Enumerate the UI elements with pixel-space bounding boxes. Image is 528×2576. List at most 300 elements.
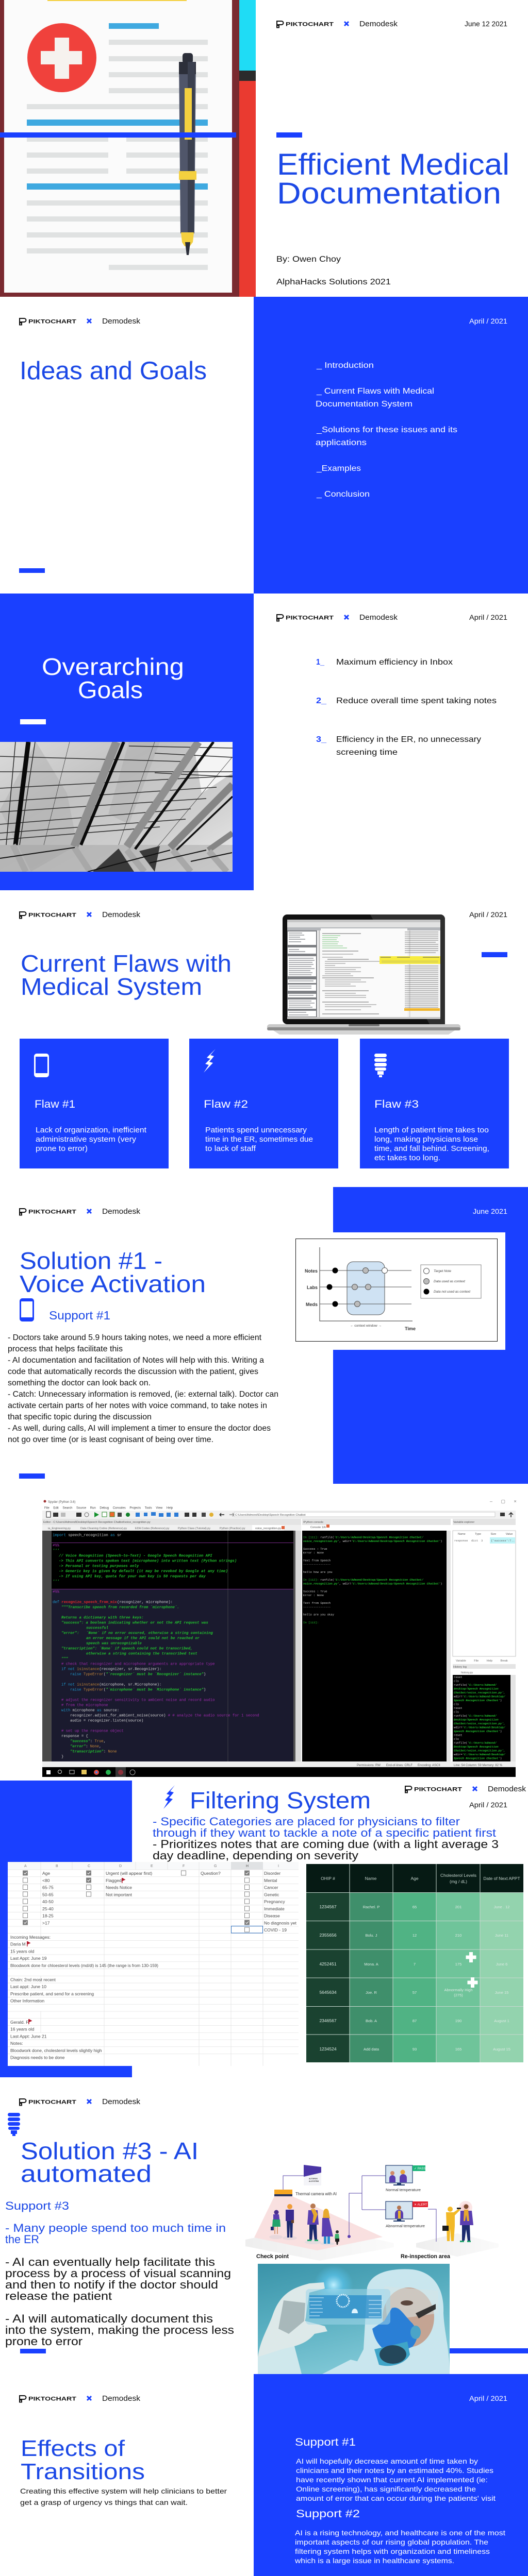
status bar: Encoding: ASCII	[418, 1764, 440, 1767]
filter columns text: Not important	[106, 1892, 133, 1897]
variable explorer panel: Variable File Help Break	[456, 1659, 508, 1663]
code editor: }	[61, 1755, 63, 1759]
variable explorer panel	[453, 1531, 516, 1674]
panel: blue agenda	[254, 297, 528, 594]
console panel: Success : True	[303, 1590, 327, 1593]
icon: lightning	[204, 1049, 216, 1073]
table: patient data: 7	[414, 1962, 416, 1967]
header logos: Demodesk	[102, 910, 141, 919]
heading: Filtering System	[190, 1787, 371, 1814]
panel: flaw 3: etc takes too long.	[374, 1154, 440, 1162]
history log panel: runfile('C:/Users/Admond/	[454, 1714, 497, 1718]
title	[277, 148, 509, 210]
history log panel: Chatbot/voice_recognition.py',	[454, 1749, 505, 1753]
table: patient data: June . 12	[494, 1905, 509, 1909]
screenshot: speech recognition code in Spyder: Spyder (Python 3.6)	[48, 1501, 75, 1504]
panel: flaw 2: Patients spend unnecessary	[205, 1126, 307, 1134]
spreadsheet screenshot: E	[151, 1865, 153, 1868]
accent bar right	[450, 2348, 528, 2353]
support 2: important aspects of our rising global population. The	[295, 2538, 488, 2546]
filter columns text: Disorder	[264, 1871, 280, 1876]
accent bar	[20, 2349, 46, 2353]
code editor: recognizer.adjust_for_ambient_noise(source) # # analyze the audio source for 1 second	[70, 1714, 259, 1718]
legend: Target Note	[434, 1269, 451, 1273]
table: patient data: (mg / dL)	[450, 1879, 467, 1884]
panel: flaw 1: prone to error)	[36, 1144, 88, 1153]
header logos: PIKTOCHART	[28, 2099, 76, 2105]
filter columns text: Needs Notice	[106, 1885, 132, 1890]
console panel: ----------------	[303, 1605, 331, 1608]
status bar: Permissions: RW	[357, 1764, 381, 1767]
header logos: PIKTOCHART	[28, 318, 76, 325]
header logos	[405, 1785, 526, 1793]
organisation: AlphaHacks Solutions 2021	[276, 278, 391, 286]
table: patient data: Abnormally High	[444, 1988, 473, 1992]
legend: Data not used as context	[434, 1290, 471, 1294]
incoming messages text: Diagnosis needs to be done	[10, 2055, 65, 2060]
body text: Creating this effective system will help clinicians to better	[20, 2487, 227, 2495]
history log panel: reset	[454, 1675, 463, 1679]
accent bar	[19, 1473, 45, 1479]
code editor: raise TypeError("`microphone` must be `Microphone` instance")	[70, 1688, 206, 1692]
table: patient data: 1234524	[319, 2046, 337, 2052]
incoming messages text: Last Appt: June 19	[10, 1956, 47, 1961]
spreadsheet screenshot: D	[119, 1865, 122, 1868]
body text: - AI will automatically document this	[5, 2312, 213, 2325]
filter columns text: Question?	[201, 1871, 221, 1876]
variable explorer panel: dict	[471, 1539, 478, 1543]
panel: blue goals	[0, 594, 254, 890]
header logos: PIKTOCHART	[286, 615, 334, 621]
table: patient data: 2355656	[319, 1933, 337, 1938]
spreadsheet screenshot: A	[24, 1865, 27, 1868]
spreadsheet screenshot: H	[246, 1865, 249, 1868]
code editor: """Transcribe speech from recorded from `microphone`.	[61, 1605, 179, 1609]
accent bar	[19, 568, 45, 573]
panel: flaw 1: Flaw #1	[35, 1098, 75, 1110]
slide 8: effects of transitions	[20, 2374, 528, 2576]
panel: flaw 2: to lack of staff	[205, 1144, 256, 1153]
accent bar	[276, 132, 302, 138]
description text	[153, 1815, 499, 1862]
table: patient data: 5645634	[319, 1990, 337, 1995]
software box: AI-SYSTEM	[309, 2180, 319, 2182]
console panel: ----------------	[303, 1563, 331, 1566]
heading	[21, 2138, 199, 2187]
variable explorer panel: 3	[481, 1539, 483, 1543]
panel: blue side	[333, 1187, 528, 1484]
people at check point	[269, 2204, 339, 2245]
variable explorer panel: history.py	[461, 1671, 473, 1674]
header logos: Demodesk	[102, 317, 141, 326]
panel: flaw 2	[189, 1039, 338, 1168]
table: patient data: 65	[412, 1905, 417, 1909]
panel tab bars: voice_recognition.py	[255, 1527, 281, 1530]
heading: Current Flaws with	[21, 950, 232, 977]
body text: release the patient	[5, 2290, 112, 2302]
body text: process that helps facilitate this	[8, 1345, 123, 1353]
panel: flaw 3: Flaw #3	[374, 1098, 419, 1110]
history log panel: reset	[454, 1733, 463, 1737]
panel tab bars: Python Class (Tutorial).py	[178, 1527, 210, 1530]
incoming messages text: Incoming Messages:	[10, 1935, 51, 1940]
filter columns text: Flagged	[106, 1878, 122, 1883]
table: patient data: Add data	[364, 2047, 380, 2052]
legend	[421, 1265, 481, 1298]
filter columns text: Urgent (will appear first)	[106, 1871, 152, 1876]
panel: flaw 1: Lack of organization, inefficient	[36, 1126, 147, 1134]
table: patient data: 175	[455, 1962, 461, 1967]
panel: flaw 2: time in the ER, sometimes due	[205, 1135, 313, 1144]
image: researcher with holographic display	[258, 2264, 450, 2374]
table: patient data: 4252451	[319, 1961, 337, 1967]
body text: code that automatically records the discussion with the patient, gives	[8, 1367, 258, 1376]
console panel: Error : None	[303, 1594, 324, 1597]
code editor: "transcription": `None` if speech could not be transcribed,	[61, 1647, 192, 1651]
table: patient data: Bolu. J	[366, 1933, 377, 1938]
people at re-inspection	[442, 2201, 473, 2242]
image: laptop with medical records	[267, 914, 460, 1035]
header logos: Demodesk	[102, 1207, 141, 1216]
taskbar	[42, 1767, 516, 1777]
code editor: Returns a dictionary with three keys:	[61, 1616, 144, 1620]
spreadsheet screenshot: I	[278, 1865, 279, 1868]
header logos	[20, 1207, 141, 1216]
filter columns text: Pregnancy	[264, 1899, 285, 1904]
history log panel: cls	[454, 1702, 459, 1706]
spreadsheet screenshot	[8, 1862, 299, 2066]
slide 2: ideas and goals	[19, 297, 528, 594]
icon: lightning	[163, 1785, 175, 1809]
description text: - Prioritizes notes that are coming due (with a light average 3	[153, 1838, 499, 1851]
table: patient data: Mona. A	[364, 1962, 378, 1967]
body text	[8, 1333, 278, 1444]
chart: context window diagram: Time	[405, 1326, 416, 1331]
history log panel: runfile('C:/Users/Admond/	[454, 1683, 497, 1687]
header logos	[277, 613, 398, 622]
body text: - Catch: Unnecessary information is removed, (ie: external talk). Doctor can	[8, 1390, 278, 1399]
header logos	[20, 2097, 141, 2106]
support 1: clinicians and their notes by an estimated 40%. Studies	[296, 2466, 493, 2475]
history log panel: Speech Recognition Chatbot')	[454, 1699, 502, 1702]
header logos: Demodesk	[102, 2097, 141, 2106]
body text: into the system, making the process less	[5, 2324, 234, 2336]
heading: Solution #3 - AI	[21, 2138, 199, 2164]
code editor: if not isinstance(microphone, sr.Microphone):	[61, 1683, 161, 1687]
monitor: normal temperature: ✓ PASS	[414, 2167, 425, 2171]
slide 3: overarching goals	[0, 594, 507, 890]
code editor: otherwise a string containing the transcribed text	[86, 1652, 197, 1656]
status bar: End-of-lines: CRLF	[386, 1764, 412, 1767]
header logos	[20, 2394, 141, 2403]
goal 3: screening time	[336, 748, 398, 757]
console panel: hello are you okay	[303, 1613, 335, 1617]
code editor: '''	[53, 1580, 59, 1584]
table: patient data: 93	[412, 2047, 417, 2052]
panel: flaw 3: long, making physicians lose	[374, 1135, 478, 1144]
status bar: Line: 54 Column: 59 Memory: 82 %	[454, 1764, 503, 1767]
variable explorer panel: response	[454, 1539, 468, 1543]
legend: Data used as context	[434, 1280, 466, 1283]
code editor: "success": True,	[70, 1739, 106, 1743]
incoming messages text: Gerald. F	[10, 2020, 28, 2025]
agenda list: _Solutions for these issues and its	[316, 426, 457, 434]
code editor: with microphone as source:	[61, 1708, 119, 1713]
panel tab bars: EDA Codes (Reference).py	[135, 1527, 170, 1530]
icon: light bulb	[374, 1054, 387, 1077]
header logos: PIKTOCHART	[28, 912, 76, 918]
screenshot: speech recognition code in Spyder: – ▢ ×	[490, 1499, 517, 1504]
panel tab bars: Variable explorer	[453, 1521, 474, 1524]
header logos: Demodesk	[359, 613, 398, 622]
history log panel: Desktop/Speech Recognition	[454, 1687, 499, 1691]
support 1: Support #1	[295, 2436, 356, 2448]
body text: - Doctors take around 5.9 hours taking notes, we need a more efficient	[8, 1333, 262, 1342]
console panel: In [113]:	[303, 1621, 319, 1624]
incoming messages text: Other Information	[10, 1998, 44, 2003]
filter columns text: No diagnosis yet	[264, 1920, 296, 1925]
history log panel: reset	[454, 1706, 463, 1710]
filter columns text: >17	[42, 1920, 50, 1925]
table: patient data: 1234567	[319, 1904, 337, 1909]
panel: flaw 3: time, and fall behind. Screening,	[374, 1144, 489, 1153]
slide 1: title	[0, 0, 509, 297]
software box	[304, 2165, 321, 2185]
agenda list: _ Current Flaws with Medical	[316, 387, 434, 396]
support 1: amount of error that can occur during the patients' visit	[296, 2494, 496, 2502]
filter columns text: Genetic	[264, 1892, 279, 1897]
code editor: // Voice Recognition (Speech-to-Text) - Google Speech Recognition API	[58, 1554, 212, 1558]
panel tab bars: Python (Practice).py	[220, 1527, 245, 1530]
body text: not go over time (or is least cognisant of being over time.	[8, 1435, 213, 1444]
table: patient data: 2346567	[319, 2018, 337, 2023]
history log panel	[453, 1675, 516, 1761]
heading: Voice Activation	[20, 1270, 206, 1297]
history log panel: wdir='C:/Users/Admond/Desktop/	[454, 1695, 506, 1698]
chart: context window diagram: Notes	[305, 1268, 318, 1274]
goal 3: Efficiency in the ER, no unnecessary	[336, 735, 481, 744]
filter columns text	[42, 1871, 296, 1933]
filter columns text: <80	[42, 1878, 50, 1883]
table: patient data: 210	[455, 1933, 461, 1938]
description text: through if they want to tackle a note of a specific patient first	[153, 1826, 496, 1839]
body text	[20, 2487, 227, 2506]
agenda list: _Examples	[316, 464, 361, 473]
history log panel: cls	[454, 1710, 459, 1714]
monitor: abnormal temperature	[386, 2201, 428, 2228]
image: medical clipboard and pen	[0, 0, 256, 297]
goal 2: 2_	[316, 697, 327, 705]
goal 2: Reduce overall time spent taking notes	[336, 697, 497, 705]
chart: context window diagram: ← context window →	[350, 1324, 382, 1328]
agenda list: Documentation System	[316, 400, 412, 409]
history log panel: wdir='C:/Users/Admond/Desktop/	[454, 1726, 506, 1729]
code editor: -> Generic key is given by default (it may be revoked by Google at any time)	[59, 1569, 228, 1573]
table: patient data: 87	[412, 2019, 417, 2023]
table: patient data: August 1	[494, 2019, 509, 2023]
table: patient data: OHIP #	[321, 1876, 335, 1881]
table: patient data: June 15	[495, 1990, 508, 1995]
date: April / 2021	[469, 910, 507, 919]
heading	[21, 950, 232, 1000]
body text	[5, 2222, 234, 2348]
body text: - As well, during calls, AI will implement a timer to ensure the doctor does	[8, 1424, 271, 1433]
monitor: normal temperature: Normal temperature	[386, 2188, 421, 2192]
accent bar	[20, 719, 46, 724]
agenda list: _ Conclusion	[316, 490, 370, 499]
table: patient data: Name	[365, 1876, 377, 1881]
incoming messages text	[10, 1935, 158, 2060]
icon: pen	[179, 53, 196, 255]
support 2	[294, 2508, 505, 2565]
filter columns text: Age	[42, 1871, 50, 1876]
table: patient data: Rachel. P	[363, 1905, 380, 1909]
date: April / 2021	[469, 317, 507, 325]
flag icons	[27, 1878, 126, 2024]
table: patient data: 201	[455, 1905, 461, 1909]
table: patient data: June 11	[495, 1933, 508, 1938]
code editor: response = {	[61, 1734, 88, 1738]
subheading: Support #1	[49, 1309, 110, 1322]
code editor: audio = recognizer.listen(source)	[70, 1719, 143, 1723]
panel: flaw 1	[20, 1039, 169, 1168]
body text: - AI can eventually help facilitate this	[5, 2256, 215, 2268]
slide 5: solution 1 voice activation	[8, 1187, 528, 1484]
filter columns text: 50-65	[42, 1892, 54, 1897]
incoming messages text: 15 years old	[10, 1948, 35, 1954]
heading: Ideas and Goals	[20, 357, 207, 385]
table: patient data: 57	[412, 1990, 417, 1995]
panel: blue side	[0, 1781, 132, 2077]
slide 6: filtering system	[0, 1781, 526, 2077]
support 2: which is a large issue in healthcare systems.	[294, 2556, 454, 2565]
description text: - Specific Categories are placed for physicians to filter	[153, 1815, 460, 1828]
monitor: abnormal temperature: Abnormal temperature	[386, 2224, 425, 2228]
diagram: thermal camera check point: Thermal camera with AI	[295, 2192, 337, 2196]
description text: day deadline, depending on severity	[153, 1849, 358, 1862]
icon: light bulb	[8, 2113, 20, 2136]
agenda list: applications	[316, 438, 367, 447]
panel tab bars: Data Cleaning Codes (Reference).py	[80, 1527, 127, 1530]
history log panel: runfile('C:/Users/Admond/	[454, 1741, 497, 1744]
incoming messages text: Chain: 2nd most recent	[10, 1977, 56, 1982]
date: June 2021	[473, 1207, 507, 1215]
panel: flaw 3	[360, 1039, 509, 1168]
heading: Overarching	[42, 653, 184, 680]
console panel: Text from Speech	[303, 1601, 331, 1605]
chart: context window diagram	[296, 1239, 497, 1342]
heading	[21, 2436, 145, 2484]
table: patient data: August 15	[493, 2047, 510, 2052]
thermal camera	[274, 2190, 292, 2196]
subheading: Support #3	[5, 2199, 69, 2212]
panel tab bars: IPython console	[303, 1521, 323, 1524]
incoming messages text: Last appt: June 10	[10, 1984, 46, 1989]
heading	[20, 1247, 206, 1297]
filter columns text: Disease	[264, 1913, 280, 1919]
incoming messages text: Bloodwork done, cholesterol levels slightly high	[10, 2048, 102, 2053]
title: Efficient Medical	[277, 148, 509, 181]
goal 1: 1_	[316, 658, 325, 667]
support 1: AI will hopefully decrease amount of time taken by	[296, 2457, 478, 2465]
incoming messages text: Prescribe patient, and send for a screening	[10, 1991, 94, 1996]
screenshot: speech recognition code in Spyder	[42, 1497, 517, 1777]
console panel: In [111]: runfile('C:/Users/Admond/Desktop/Speech Recognition Chatbot/	[303, 1535, 424, 1539]
history log panel: Desktop/Speech Recognition	[454, 1718, 499, 1722]
header logos: PIKTOCHART	[414, 1786, 462, 1792]
white chart backing	[289, 1232, 505, 1350]
code editor: # adjust the recognizer sensitivity to ambient noise and record audio	[61, 1698, 215, 1702]
heading: Effects of	[21, 2436, 125, 2461]
date: April / 2021	[469, 613, 507, 621]
code editor: """	[61, 1657, 69, 1661]
console panel: Text from Speech	[303, 1559, 331, 1562]
console panel: voice_recognition.py', wdir='C:/Users/Admond/Desktop/Speech Recognition Chatbot')	[303, 1582, 442, 1586]
history log panel: cls	[454, 1737, 459, 1741]
toolbar: C:\Users\Admond\Desktop\Speech Recognition Chatbot	[235, 1514, 306, 1517]
code editor: # check that recognizer and microphone arguments are appropriate type	[61, 1662, 215, 1666]
console panel: In [112]: runfile('C:/Users/Admond/Desktop/Speech Recognition Chatbot/	[303, 1578, 424, 1582]
panel: blue supports	[254, 2374, 528, 2576]
code editor: "error": None,	[70, 1744, 101, 1749]
table: patient data: Bob. A	[366, 2019, 377, 2023]
filter columns text: Immediate	[264, 1906, 285, 1911]
code editor: "success": a boolean indicating whether or not the API request was	[61, 1621, 208, 1625]
body text: get a grasp of urgency vs things that can wait.	[20, 2498, 188, 2506]
console panel: hello how are you	[303, 1570, 333, 1574]
date: April / 2021	[469, 2394, 507, 2402]
connector lines	[283, 2176, 436, 2242]
panel tab bars	[42, 1519, 516, 1531]
history log panel: Speech Recognition Chatbot')	[454, 1730, 502, 1733]
body text: process by a process of visual scanning	[5, 2267, 231, 2280]
support 1: Online screening), has significantly decreased the	[296, 2485, 476, 2493]
table: patient data	[306, 1864, 523, 2062]
code editor: import speech_recognition as sr	[53, 1533, 122, 1537]
history log panel: cls	[454, 1680, 459, 1683]
history log panel: Chatbot/voice_recognition.py',	[454, 1691, 505, 1694]
filter columns text: 25-40	[42, 1906, 54, 1911]
header logos: Demodesk	[488, 1785, 526, 1793]
panel: flaw 1: administrative system (very	[36, 1135, 137, 1144]
variable explorer panel: {'success':T..	[491, 1539, 515, 1543]
console panel: Success : True	[303, 1547, 327, 1551]
code editor: -> If using API key, quota for your own key is 50 requests per day	[59, 1574, 206, 1579]
filter columns text: 65-75	[42, 1885, 54, 1890]
date: June 12 2021	[465, 20, 507, 28]
panel tab bars: Editor - C:\Users\Admond\Desktop\Speech Recognition Chatbot\voice_recognition.py	[43, 1521, 151, 1524]
incoming messages text: Daria M	[10, 1941, 26, 1946]
monitor: normal temperature	[386, 2165, 425, 2192]
heading: Solution #1 -	[20, 1247, 162, 1274]
header logos: Demodesk	[102, 2394, 141, 2403]
toolbar	[42, 1511, 516, 1519]
body text: - AI documentation and facilitation of Notes will help with this. Writing a	[8, 1356, 264, 1365]
icon: phone	[35, 1054, 48, 1077]
code editor: # from the microphone	[61, 1703, 108, 1707]
console panel	[302, 1531, 451, 1761]
panel: flaw 3: Length of patient time takes too	[374, 1126, 489, 1134]
code editor: # set up the response object	[61, 1729, 124, 1733]
support 1	[295, 2436, 496, 2502]
body text: prone to error	[5, 2335, 82, 2348]
body text: and then to notify if the doctor should	[5, 2278, 218, 2291]
heading: Goals	[78, 676, 143, 703]
history log panel: Speech Recognition Chatbot')	[454, 1757, 502, 1760]
console panel: voice_recognition.py', wdir='C:/Users/Admond/Desktop/Speech Recognition Chatbot')	[303, 1539, 442, 1543]
body text: that specific topic during the discussion	[8, 1413, 152, 1421]
accent bar	[482, 952, 507, 957]
